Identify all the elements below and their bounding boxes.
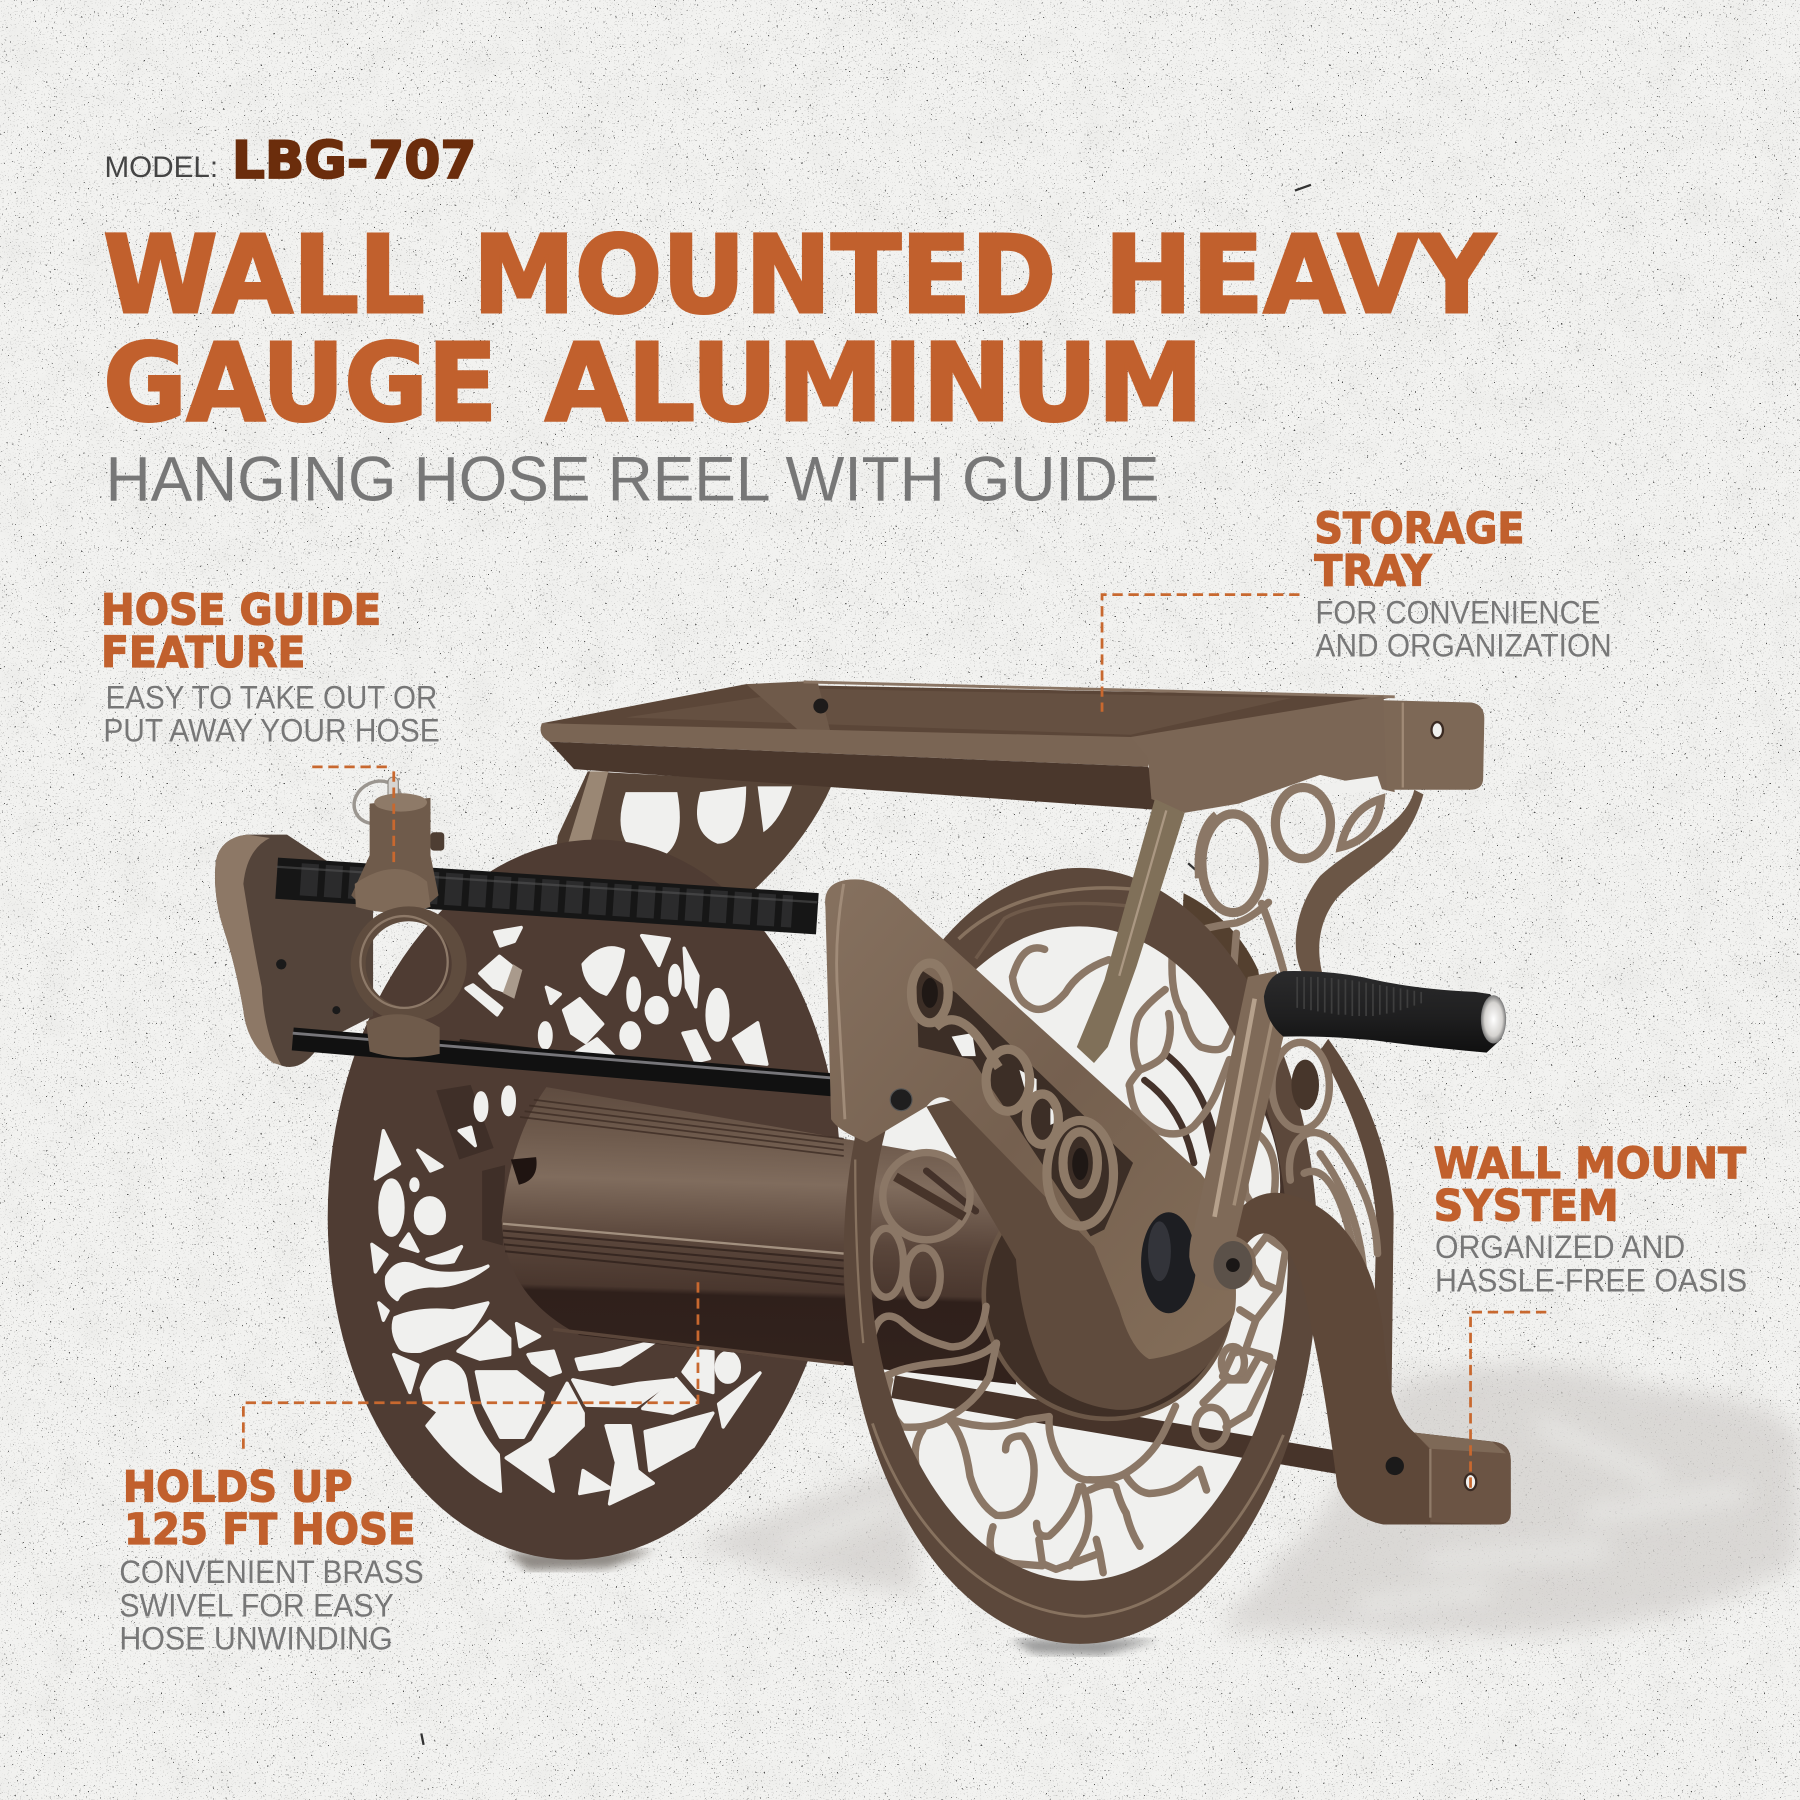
callout: holds up 125 ft hose: SWIVEL FOR EASY bbox=[119, 1587, 394, 1623]
hose guide carriage with ring bbox=[347, 774, 459, 1057]
callout: wall mount system: WALL MOUNT bbox=[1434, 1140, 1746, 1189]
callout: wall mount system bbox=[1434, 1140, 1747, 1488]
tray front rail bbox=[541, 723, 1151, 767]
title: MOUNTED bbox=[473, 214, 1056, 338]
far reel wheel bbox=[304, 822, 865, 1577]
storage tray bbox=[541, 681, 1484, 1063]
callout: holds up 125 ft hose: 125 FT HOSE bbox=[124, 1506, 416, 1555]
near wheel inner opening bbox=[870, 926, 1288, 1581]
title: GAUGE bbox=[103, 322, 497, 446]
callout: hose guide feature: FEATURE bbox=[101, 629, 305, 678]
tray leg bbox=[1077, 799, 1185, 1063]
callout: wall mount system: SYSTEM bbox=[1434, 1182, 1619, 1231]
arm screw bbox=[890, 1089, 912, 1111]
tray right side panel bbox=[1131, 696, 1395, 813]
title: ALUMINUM bbox=[545, 322, 1203, 446]
arm openwork window bbox=[916, 967, 1133, 1236]
upper right bracket with rings bbox=[1199, 788, 1423, 978]
rear support rod bbox=[893, 1387, 1345, 1464]
back left bracket with tracery bbox=[549, 771, 832, 918]
callout: storage tray: STORAGE bbox=[1314, 505, 1524, 554]
black hub nut bbox=[1141, 1212, 1196, 1313]
S-curve wall mount arm and foot bbox=[1217, 1193, 1511, 1524]
callout: storage tray: AND ORGANIZATION bbox=[1316, 628, 1612, 664]
callout: hose guide feature: HOSE GUIDE bbox=[101, 586, 381, 635]
title: WALL bbox=[103, 214, 425, 338]
wall mount top bbox=[1383, 700, 1484, 790]
callout: storage tray: FOR CONVENIENCE bbox=[1316, 594, 1600, 630]
subtitle: HANGING HOSE REEL WITH GUIDE bbox=[106, 445, 1159, 515]
callout: holds up 125 ft hose: HOSE UNWINDING bbox=[119, 1621, 393, 1657]
threaded hose guide bar bbox=[277, 867, 817, 914]
hose drum bbox=[502, 1087, 1016, 1384]
callout: storage tray: TRAY bbox=[1314, 547, 1433, 596]
callout: hose guide feature: PUT AWAY YOUR HOSE bbox=[103, 713, 440, 749]
far wheel cut-outs bbox=[372, 928, 767, 1504]
model label bbox=[104, 131, 476, 191]
crank arm bbox=[1189, 971, 1283, 1290]
title bbox=[103, 214, 1496, 446]
callout: wall mount system: HASSLE-FREE OASIS bbox=[1435, 1262, 1747, 1298]
lower guide rod bbox=[293, 1033, 838, 1091]
near wheel scrollwork bbox=[869, 893, 1286, 1573]
rear hub disc bbox=[984, 1171, 1232, 1419]
model label: LBG-707 bbox=[232, 131, 476, 191]
callout: hose guide feature: EASY TO TAKE OUT OR bbox=[106, 679, 437, 715]
crank handle grip bbox=[1264, 971, 1506, 1053]
left end plate bbox=[215, 835, 373, 1067]
model label: MODEL: bbox=[104, 151, 218, 184]
title: HEAVY bbox=[1104, 214, 1496, 338]
callout: hose guide feature bbox=[101, 586, 440, 863]
cast shadow on floor bbox=[505, 1364, 1800, 1655]
callout: holds up 125 ft hose: HOLDS UP bbox=[123, 1464, 352, 1513]
near wheel rim bbox=[844, 868, 1318, 1644]
reel arm with hub and openwork bbox=[825, 879, 1236, 1410]
callout: storage tray bbox=[1102, 505, 1612, 712]
callout: wall mount system: ORGANIZED AND bbox=[1435, 1229, 1685, 1265]
arm lower plate bbox=[926, 1100, 1233, 1410]
right side bracket and nested scrolls bbox=[1272, 1039, 1394, 1418]
callout: holds up 125 ft hose: CONVENIENT BRASS bbox=[119, 1554, 424, 1590]
far wheel tan leg glimpse bbox=[503, 964, 522, 999]
callout: holds up 125 ft hose bbox=[119, 1280, 698, 1657]
